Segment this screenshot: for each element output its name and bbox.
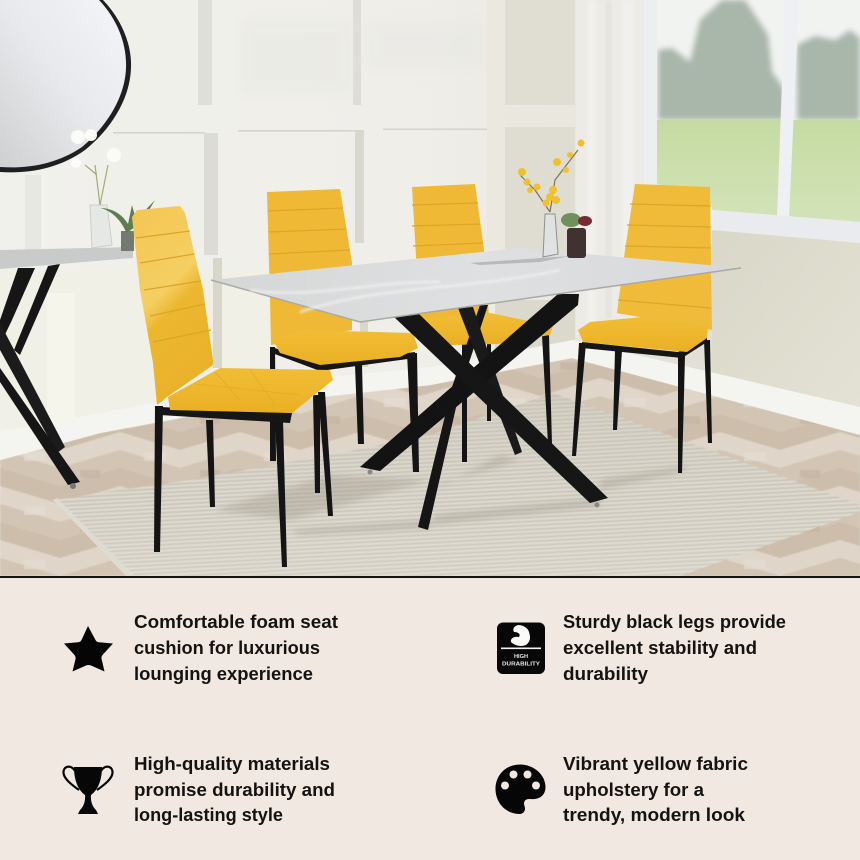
text: black legs: durability: [563, 664, 648, 684]
text: black legs: excellent stability and: [563, 638, 757, 658]
chair: back right: [412, 184, 553, 462]
icon: star: [64, 626, 113, 672]
text: materials: promise durability and: [134, 780, 335, 800]
skirting board: [0, 340, 860, 460]
icon: high durability badge: DURABILITY: [502, 662, 540, 668]
chair: back left: [267, 189, 419, 472]
icon: high durability badge: [497, 622, 545, 674]
text: materials: long-lasting style: [134, 805, 283, 825]
right wall: [712, 230, 860, 408]
flower vase left: [71, 129, 155, 251]
floor: [0, 358, 860, 576]
text: black legs: Sturdy black legs provide: [563, 612, 786, 632]
icon: palette: [496, 764, 546, 814]
icon: trophy: [63, 767, 113, 814]
text: materials: High-quality materials: [134, 754, 330, 774]
text: foam seat: lounging experience: [134, 664, 313, 684]
text: yellow fabric: trendy, modern look: [563, 805, 746, 825]
table top: [211, 248, 741, 322]
panel: features: [0, 578, 860, 860]
flower vase right: [518, 140, 592, 258]
text: yellow fabric: upholstery for a: [563, 780, 705, 800]
distant trees: [658, 0, 860, 120]
wall panelling: [25, 0, 575, 368]
rug: [53, 393, 860, 576]
icon: high durability badge: HIGH: [514, 654, 528, 660]
panel: room photo: [0, 0, 860, 576]
console table: [0, 247, 133, 489]
divider line: [0, 576, 860, 578]
table legs: [360, 294, 608, 530]
text: foam seat: Comfortable foam seat: [134, 612, 338, 632]
mirror: [0, 0, 131, 172]
curtain: [576, 0, 646, 335]
text: foam seat: cushion for luxurious: [134, 638, 320, 658]
window: [644, 0, 860, 244]
wall: [0, 0, 860, 576]
chair: far right: [572, 184, 712, 473]
rug shadows: [215, 455, 690, 535]
chair: front left: [132, 206, 333, 567]
text: yellow fabric: Vibrant yellow fabric: [563, 754, 748, 774]
